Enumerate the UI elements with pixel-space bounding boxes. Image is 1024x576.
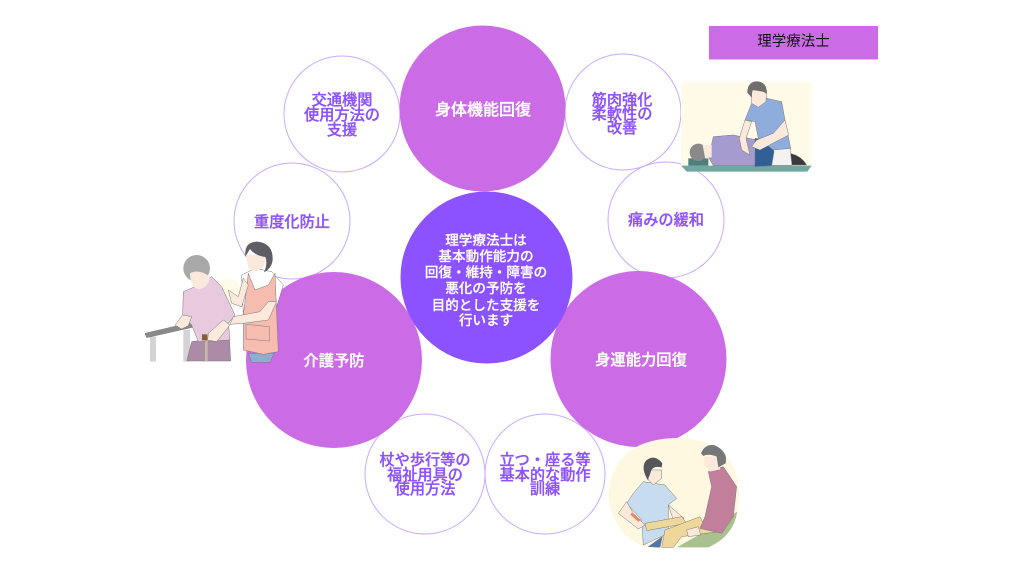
large circle: physical function recovery	[400, 26, 566, 192]
small circle: muscle improvement: 筋肉強化	[592, 92, 652, 109]
small circle: prevent aggravation: 重度化防止	[254, 214, 330, 231]
small circle: basic movement training: 訓練	[530, 481, 560, 498]
center circle: role summary	[400, 192, 572, 364]
small circle: muscle improvement	[565, 54, 681, 170]
small circle: welfare equipment	[365, 414, 485, 534]
center circle: role summary: 悪化の予防を	[445, 281, 527, 296]
small circle: welfare equipment: 杖や歩行等の	[379, 451, 471, 469]
illustration: therapist and seated patient with belt	[608, 438, 739, 547]
small circle: basic movement training	[485, 414, 605, 534]
small circle: welfare equipment: 福祉用具の	[387, 467, 463, 484]
small circle: pain relief	[608, 162, 724, 278]
small circle: transport use	[284, 56, 400, 172]
small circle: muscle improvement: 改善	[607, 120, 637, 137]
large circle: care prevention: 介護予防	[303, 353, 365, 370]
center circle: role summary: 理学療法士は	[445, 232, 527, 248]
small circle: transport use: 交通機関	[312, 92, 372, 109]
small circle: welfare equipment: 使用方法	[395, 481, 455, 498]
center circle: role summary: 基本動作能力の	[438, 248, 534, 264]
large circle: motor ability recovery: 身運能力回復	[595, 352, 687, 369]
large circle: care prevention	[246, 272, 422, 448]
small circle: prevent aggravation	[234, 163, 350, 279]
small circle: transport use: 使用方法の	[304, 107, 380, 124]
title label	[709, 26, 878, 60]
illustration: caregiver supporting elderly walker	[145, 242, 283, 362]
illustration: therapist treating lying patient	[681, 81, 812, 172]
title label: 理学療法士	[757, 33, 830, 50]
small circle: muscle improvement: 柔軟性の	[592, 106, 652, 123]
center circle: role summary: 行います	[459, 313, 513, 328]
small circle: basic movement training: 基本的な動作	[499, 467, 591, 484]
large circle: motor ability recovery	[550, 271, 726, 447]
large circle: physical function recovery: 身体機能回復	[435, 101, 531, 119]
small circle: transport use: 支援	[327, 122, 357, 139]
center circle: role summary: 目的とした支援を	[432, 298, 540, 313]
small circle: pain relief: 痛みの緩和	[628, 212, 704, 229]
center circle: role summary: 回復・維持・障害の	[425, 264, 547, 280]
small circle: basic movement training: 立つ・座る等	[499, 451, 591, 469]
